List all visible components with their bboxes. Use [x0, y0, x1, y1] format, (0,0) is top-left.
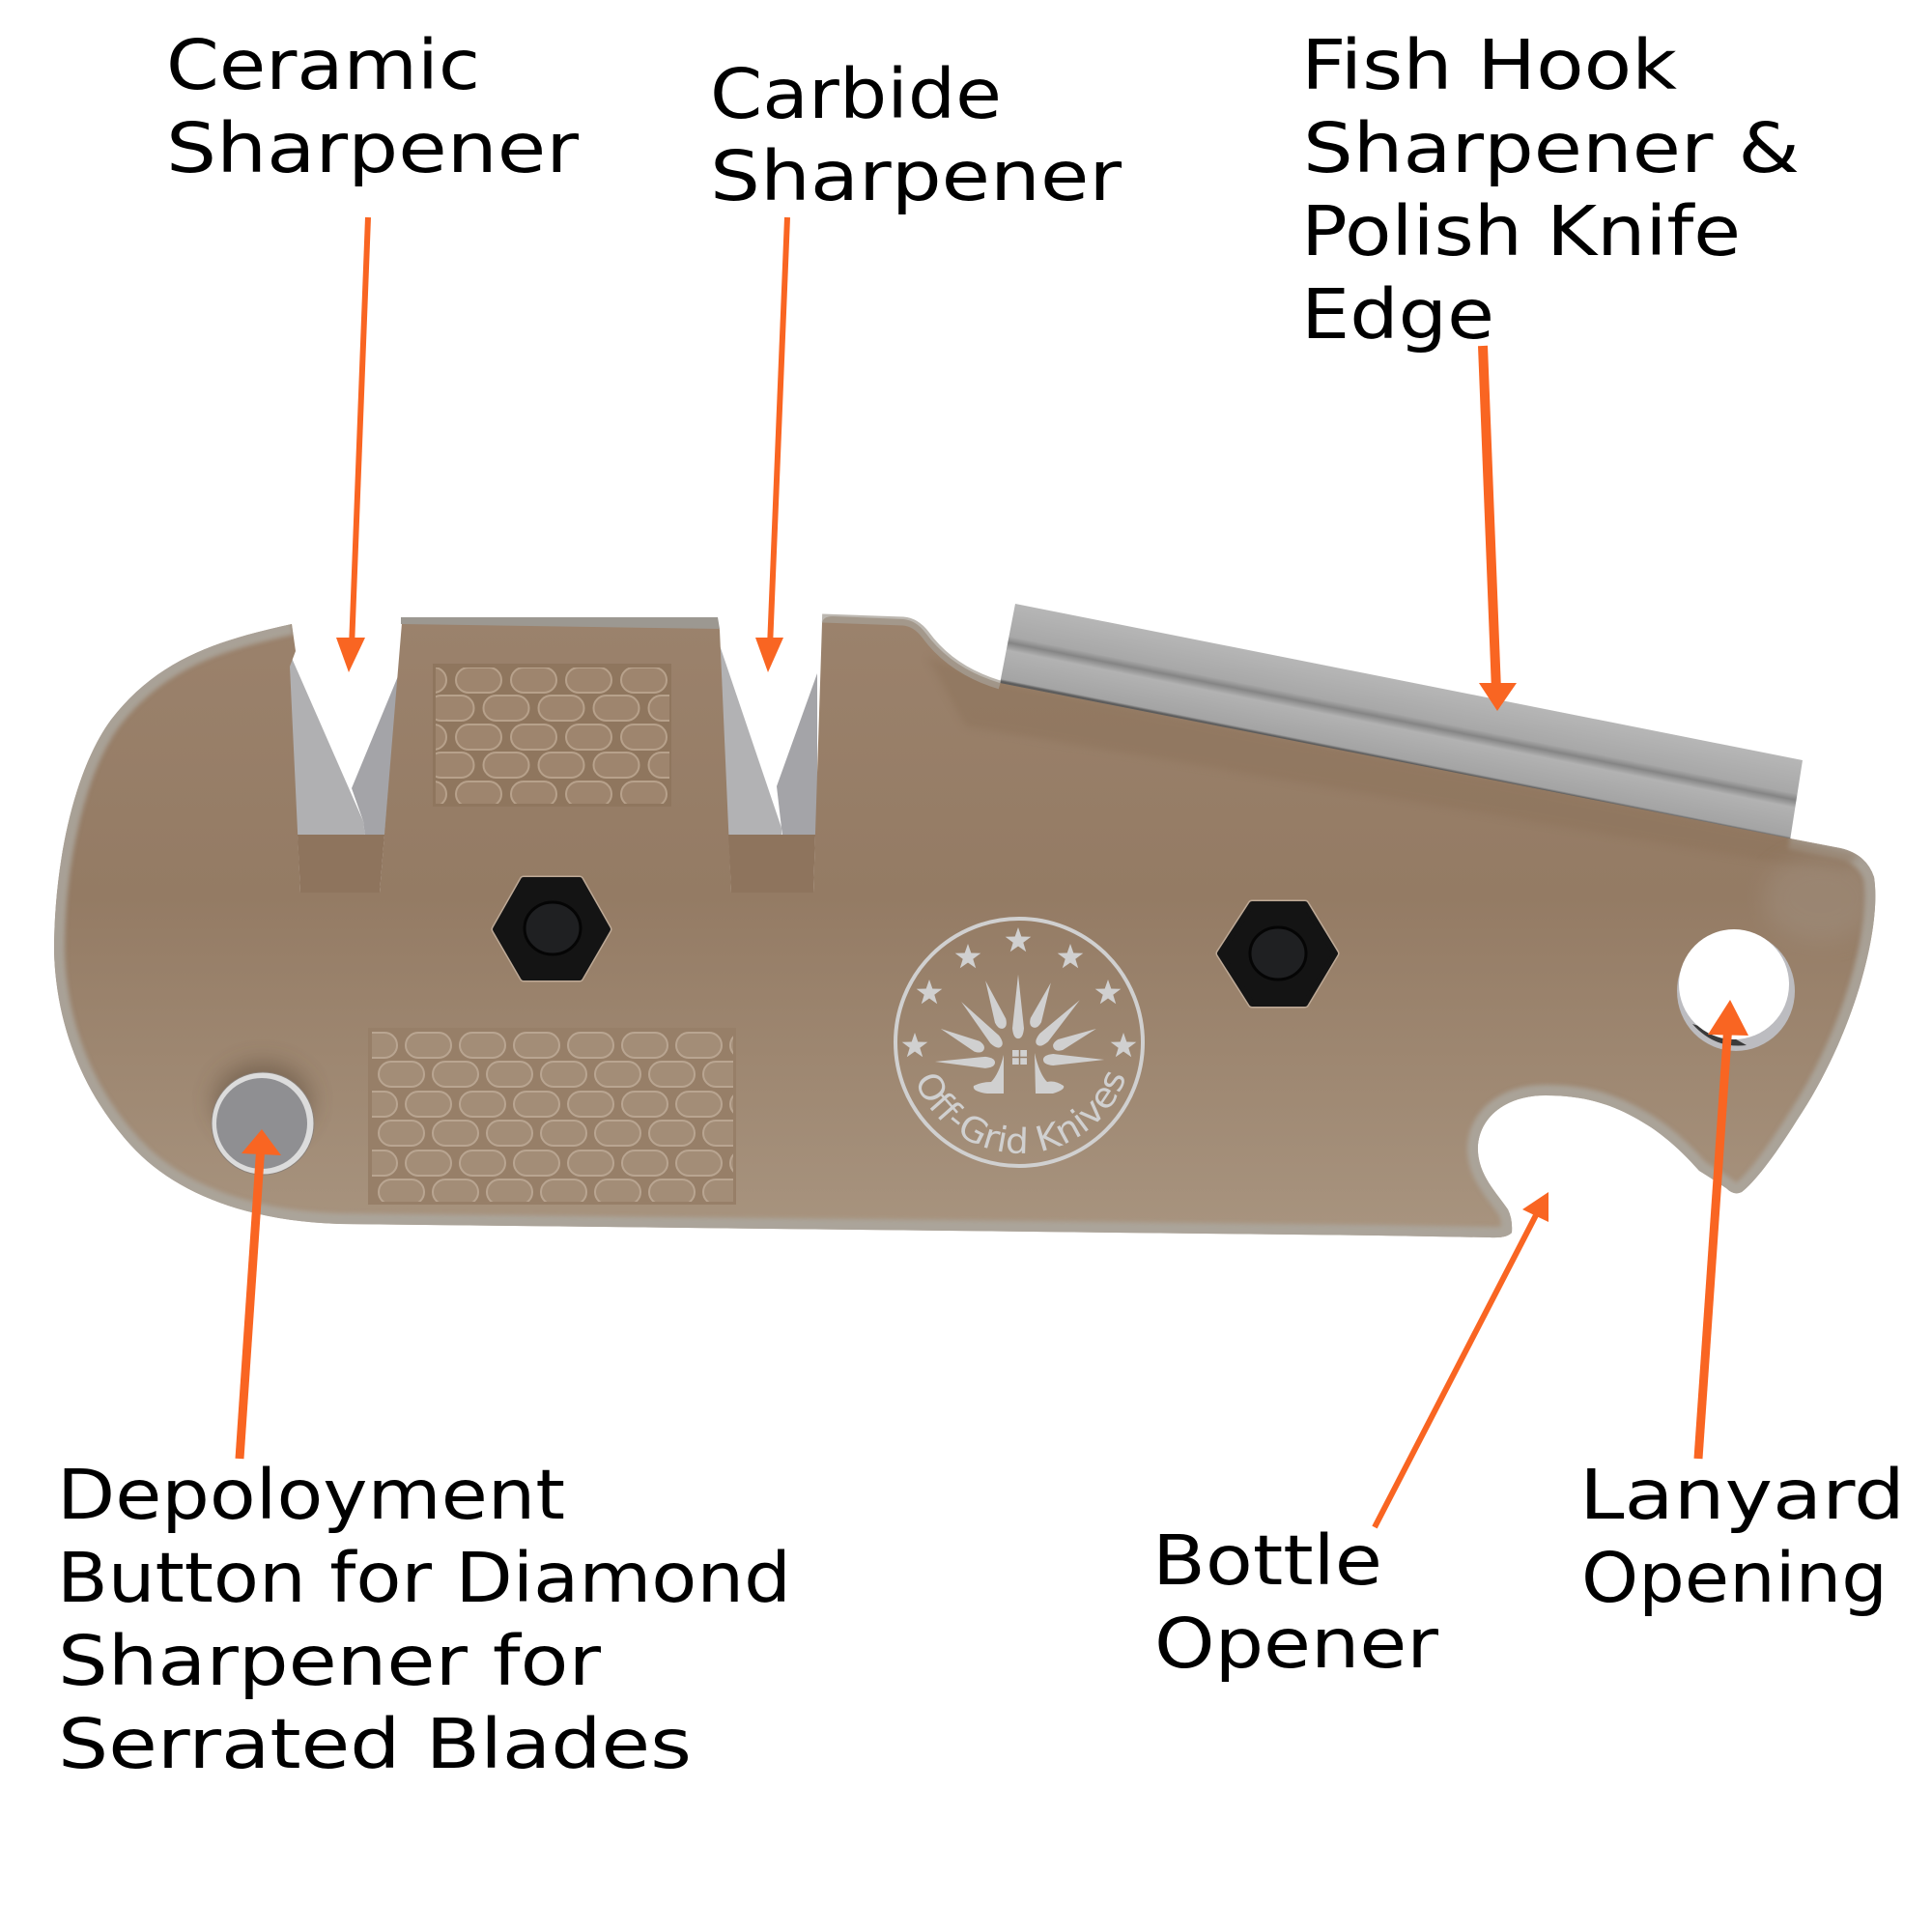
label: deployment button: Button for Diamond [57, 1538, 791, 1618]
label: bottle opener: Opener [1154, 1604, 1439, 1684]
body [54, 616, 1879, 1237]
label: deployment button: Depoloyment [57, 1455, 565, 1535]
label: ceramic sharpener: Ceramic [166, 25, 480, 105]
fish hook sharpener bar [1000, 604, 1803, 840]
label: lanyard opening [1579, 1455, 1905, 1618]
sharpener product [54, 604, 1876, 1238]
hex screw left [496, 880, 608, 978]
logo: Off-Grid Knives [918, 1072, 1124, 1153]
arrow: bottle opener [1375, 1192, 1548, 1527]
label: lanyard opening: Lanyard [1579, 1455, 1905, 1535]
logo [894, 917, 1145, 1168]
label: fish hook sharpener: Sharpener & [1303, 108, 1800, 188]
label: bottle opener [1152, 1520, 1439, 1684]
arrow: deployment button [240, 1129, 281, 1459]
lanyard opening [1677, 929, 1795, 1051]
arrow: fish hook sharpener [1479, 346, 1517, 711]
label: ceramic sharpener [166, 25, 580, 188]
arrow: ceramic sharpener [336, 217, 368, 672]
grip panel top [433, 664, 671, 807]
label: fish hook sharpener: Edge [1301, 274, 1494, 355]
label: ceramic sharpener: Sharpener [166, 108, 580, 188]
grip panel bottom [368, 1028, 736, 1205]
label: carbide sharpener [710, 54, 1122, 216]
arrow: lanyard opening [1698, 1000, 1748, 1459]
label: lanyard opening: Opening [1581, 1538, 1888, 1618]
slot lower face: carbide [728, 835, 815, 893]
label: carbide sharpener: Sharpener [710, 136, 1122, 216]
slot lower face: ceramic [298, 835, 384, 893]
slot surfaces: carbide [719, 642, 817, 837]
label: fish hook sharpener: Fish Hook [1301, 25, 1677, 105]
label: deployment button [57, 1455, 791, 1784]
label: fish hook sharpener: Polish Knife [1301, 191, 1741, 271]
deployment button [212, 1063, 314, 1175]
slot surfaces: ceramic [288, 649, 398, 837]
top rim strips [401, 617, 1000, 685]
label: carbide sharpener: Carbide [710, 54, 1002, 134]
label: deployment button: Serrated Blades [58, 1704, 692, 1784]
label: bottle opener: Bottle [1152, 1520, 1382, 1601]
label: fish hook sharpener [1301, 25, 1800, 355]
arrow: carbide sharpener [755, 217, 787, 672]
label: deployment button: Sharpener for [58, 1621, 602, 1701]
hex screw right [1220, 904, 1335, 1004]
